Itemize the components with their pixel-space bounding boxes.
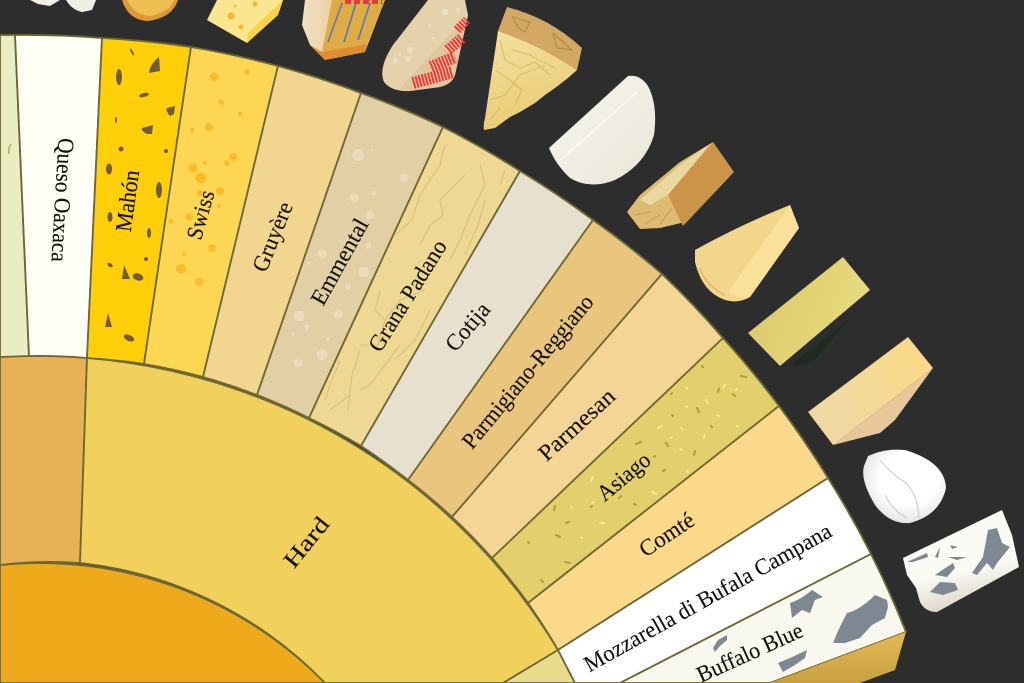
segment: Mahón: Mahón xyxy=(111,168,144,233)
icon: white cheese pieces xyxy=(30,0,96,12)
segment: Parmesan: Parmesan xyxy=(533,383,621,466)
segment: Mozzarella di Bufala Campana xyxy=(558,478,871,683)
segment: Buffalo Blue xyxy=(620,554,906,683)
block side face xyxy=(770,632,906,683)
inner ring: centre disk xyxy=(0,563,325,683)
middle ring: Hard segment xyxy=(80,358,558,683)
icon: Cotija half round xyxy=(549,76,655,185)
segment: unnamed pale cheese xyxy=(0,35,29,357)
segment: Parmigiano-Reggiano: Parmigiano-Reggiano xyxy=(457,290,599,454)
icon: Swiss wedge xyxy=(207,0,283,43)
segment: Queso Oaxaca: Queso Oaxaca xyxy=(46,137,79,263)
segment: Grana Padano xyxy=(309,127,520,446)
icon: Emmental wedge with red stamp xyxy=(382,0,468,91)
segment: Parmigiano-Reggiano xyxy=(408,220,662,517)
segment: Swiss xyxy=(144,47,278,377)
segment: Asiago xyxy=(492,338,779,603)
icon: Grana Padano wedge xyxy=(484,7,582,130)
segment: Emmental: Emmental xyxy=(306,214,374,309)
segment: Mahón xyxy=(87,38,191,364)
icon: Parmigiano-Reggiano wedge xyxy=(627,142,734,229)
icon: mozzarella ball xyxy=(863,450,946,523)
segment: Asiago: Asiago xyxy=(592,447,655,506)
icon: Comté block xyxy=(808,337,933,445)
segment: Gruyère: Gruyère xyxy=(247,198,298,275)
segment: Grana Padano: Grana Padano xyxy=(363,235,452,356)
icon: blue cheese block xyxy=(903,510,1019,612)
middle ring: Hard segment: Hard xyxy=(278,511,335,573)
segment: Mozzarella di Bufala Campana: Mozzarella di Bufala Campana xyxy=(580,518,836,677)
segment: Cotija xyxy=(361,171,593,480)
icon: boxed gold cheese xyxy=(302,0,385,60)
middle ring: next segment xyxy=(503,650,575,683)
icon: Parmesan wedge xyxy=(695,205,799,301)
segment: Comté: Comté xyxy=(634,507,699,562)
segment: Queso Oaxaca xyxy=(15,35,102,358)
segment: Swiss: Swiss xyxy=(182,187,219,242)
middle ring: left segment xyxy=(0,356,87,565)
icon: round orange cheese xyxy=(122,0,178,21)
icon: Asiago block with shadow xyxy=(748,257,870,366)
segment: Emmental xyxy=(257,93,443,418)
segment: Gruyère xyxy=(203,66,361,395)
segment: Cotija: Cotija xyxy=(440,297,495,356)
segment: Comté xyxy=(528,406,828,650)
segment: Parmesan xyxy=(452,274,723,558)
